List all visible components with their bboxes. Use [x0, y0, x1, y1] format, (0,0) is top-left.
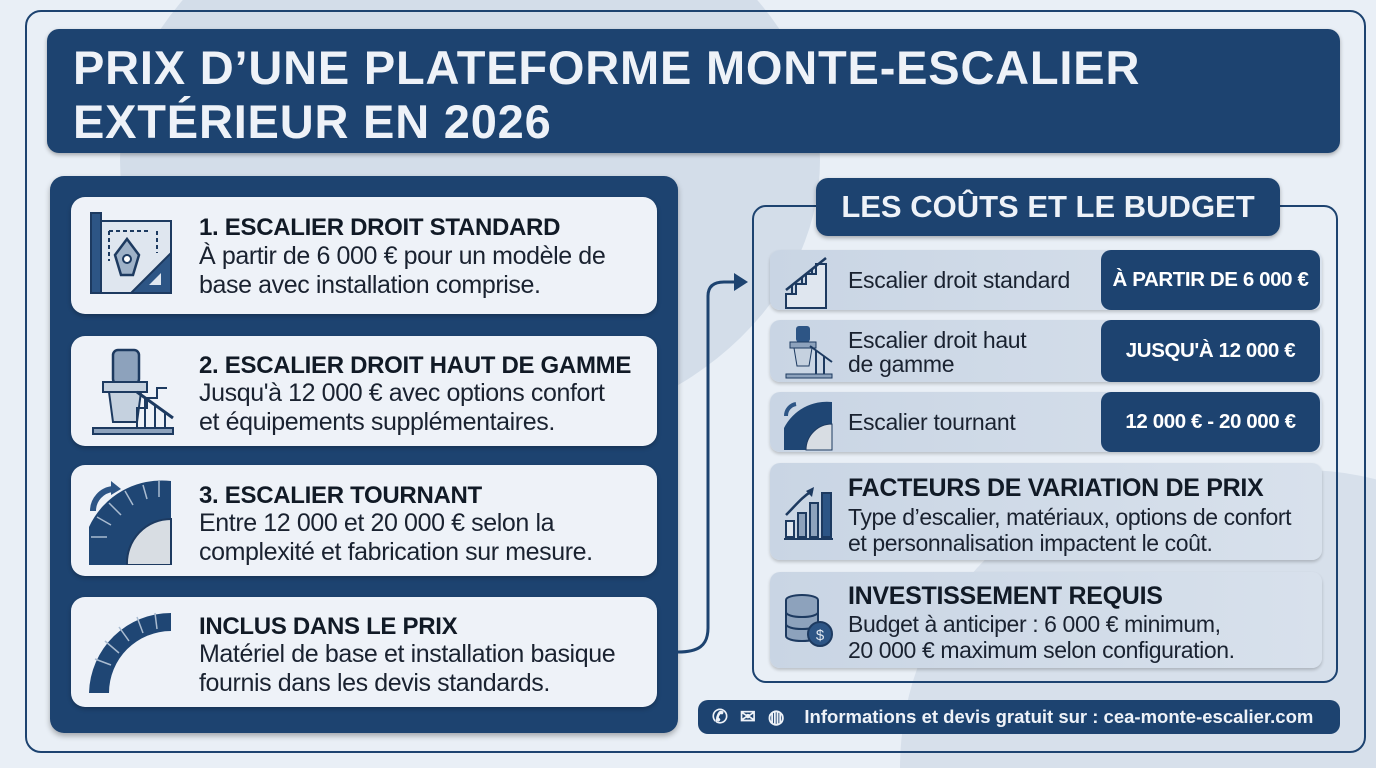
row: tournant: Escalier tournant — [848, 409, 1016, 435]
text: fournis dans les devis standards. — [199, 669, 550, 697]
heading: INVESTISSEMENT REQUIS — [848, 582, 1163, 610]
title: EXTÉRIEUR EN 2026 — [73, 95, 552, 148]
row: standard: Escalier droit standard — [848, 267, 1070, 293]
icon: curved stair — [89, 613, 171, 693]
footer — [698, 700, 1340, 734]
icon: coins — [785, 594, 833, 647]
heading: 2. ESCALIER DROIT HAUT DE GAMME — [199, 352, 631, 379]
text — [199, 640, 615, 697]
text: complexité et fabrication sur mesure. — [199, 538, 593, 566]
panel: left types — [50, 176, 678, 733]
card 4 — [71, 597, 657, 707]
panel: costs — [752, 205, 1338, 683]
icon: coins: $ — [816, 627, 825, 644]
price: À PARTIR DE 6 000 € — [1113, 268, 1308, 291]
heading: costs: LES COÛTS ET LE BUDGET — [841, 189, 1255, 224]
icon: stairs — [785, 257, 827, 309]
row: facteurs — [770, 463, 1322, 560]
title: PRIX D’UNE PLATEFORME MONTE-ESCALIER — [73, 41, 1140, 94]
row: investissement — [770, 572, 1322, 668]
card 2 — [71, 336, 657, 446]
row: haut de gamme: Escalier droit haut — [848, 327, 1026, 353]
heading: 3. ESCALIER TOURNANT — [199, 482, 482, 509]
icon: stair lift — [92, 348, 174, 435]
price — [1101, 320, 1320, 382]
price — [1101, 250, 1320, 310]
price: JUSQU'À 12 000 € — [1126, 339, 1295, 362]
text: base avec installation comprise. — [199, 271, 541, 299]
background decoration — [120, 0, 820, 440]
text — [848, 504, 1292, 556]
row: haut de gamme: de gamme — [848, 351, 954, 377]
heading: INCLUS DANS LE PRIX — [199, 613, 457, 640]
text — [848, 611, 1235, 663]
price: 12 000 € - 20 000 € — [1125, 410, 1296, 433]
text: Budget à anticiper : 6 000 € minimum, — [848, 611, 1221, 637]
text: Entre 12 000 et 20 000 € selon la — [199, 509, 554, 537]
icon: spiral stair — [89, 480, 172, 565]
text — [199, 379, 605, 436]
row: standard — [770, 250, 1322, 310]
text: Jusqu'à 12 000 € avec options confort — [199, 379, 605, 407]
icon: blueprint — [90, 212, 172, 294]
text — [199, 509, 593, 566]
icon: stair lift — [786, 326, 832, 378]
icons: contact: ✆✉◍ — [712, 706, 796, 728]
row: tournant — [770, 392, 1322, 452]
card 1 — [71, 197, 657, 314]
heading: FACTEURS DE VARIATION DE PRIX — [848, 474, 1263, 502]
title — [47, 29, 1340, 153]
text: website: Informations et devis gratuit sur : cea-monte-escalier.com — [804, 706, 1313, 727]
text: 20 000 € maximum selon configuration. — [848, 637, 1235, 663]
arrow: connector — [678, 273, 748, 654]
text — [199, 242, 605, 299]
price — [1101, 392, 1320, 452]
text: et équipements supplémentaires. — [199, 408, 555, 436]
heading: costs — [816, 178, 1280, 236]
text: et personnalisation impactent le coût. — [848, 530, 1213, 556]
text: Matériel de base et installation basique — [199, 640, 615, 668]
icon: bar chart — [784, 487, 833, 540]
row: haut de gamme — [770, 320, 1322, 382]
heading: 1. ESCALIER DROIT STANDARD — [199, 214, 560, 241]
icon: spiral — [784, 402, 832, 450]
text: À partir de 6 000 € pour un modèle de — [199, 242, 605, 270]
card 3 — [71, 465, 657, 576]
text: Type d’escalier, matériaux, options de confort — [848, 504, 1291, 530]
